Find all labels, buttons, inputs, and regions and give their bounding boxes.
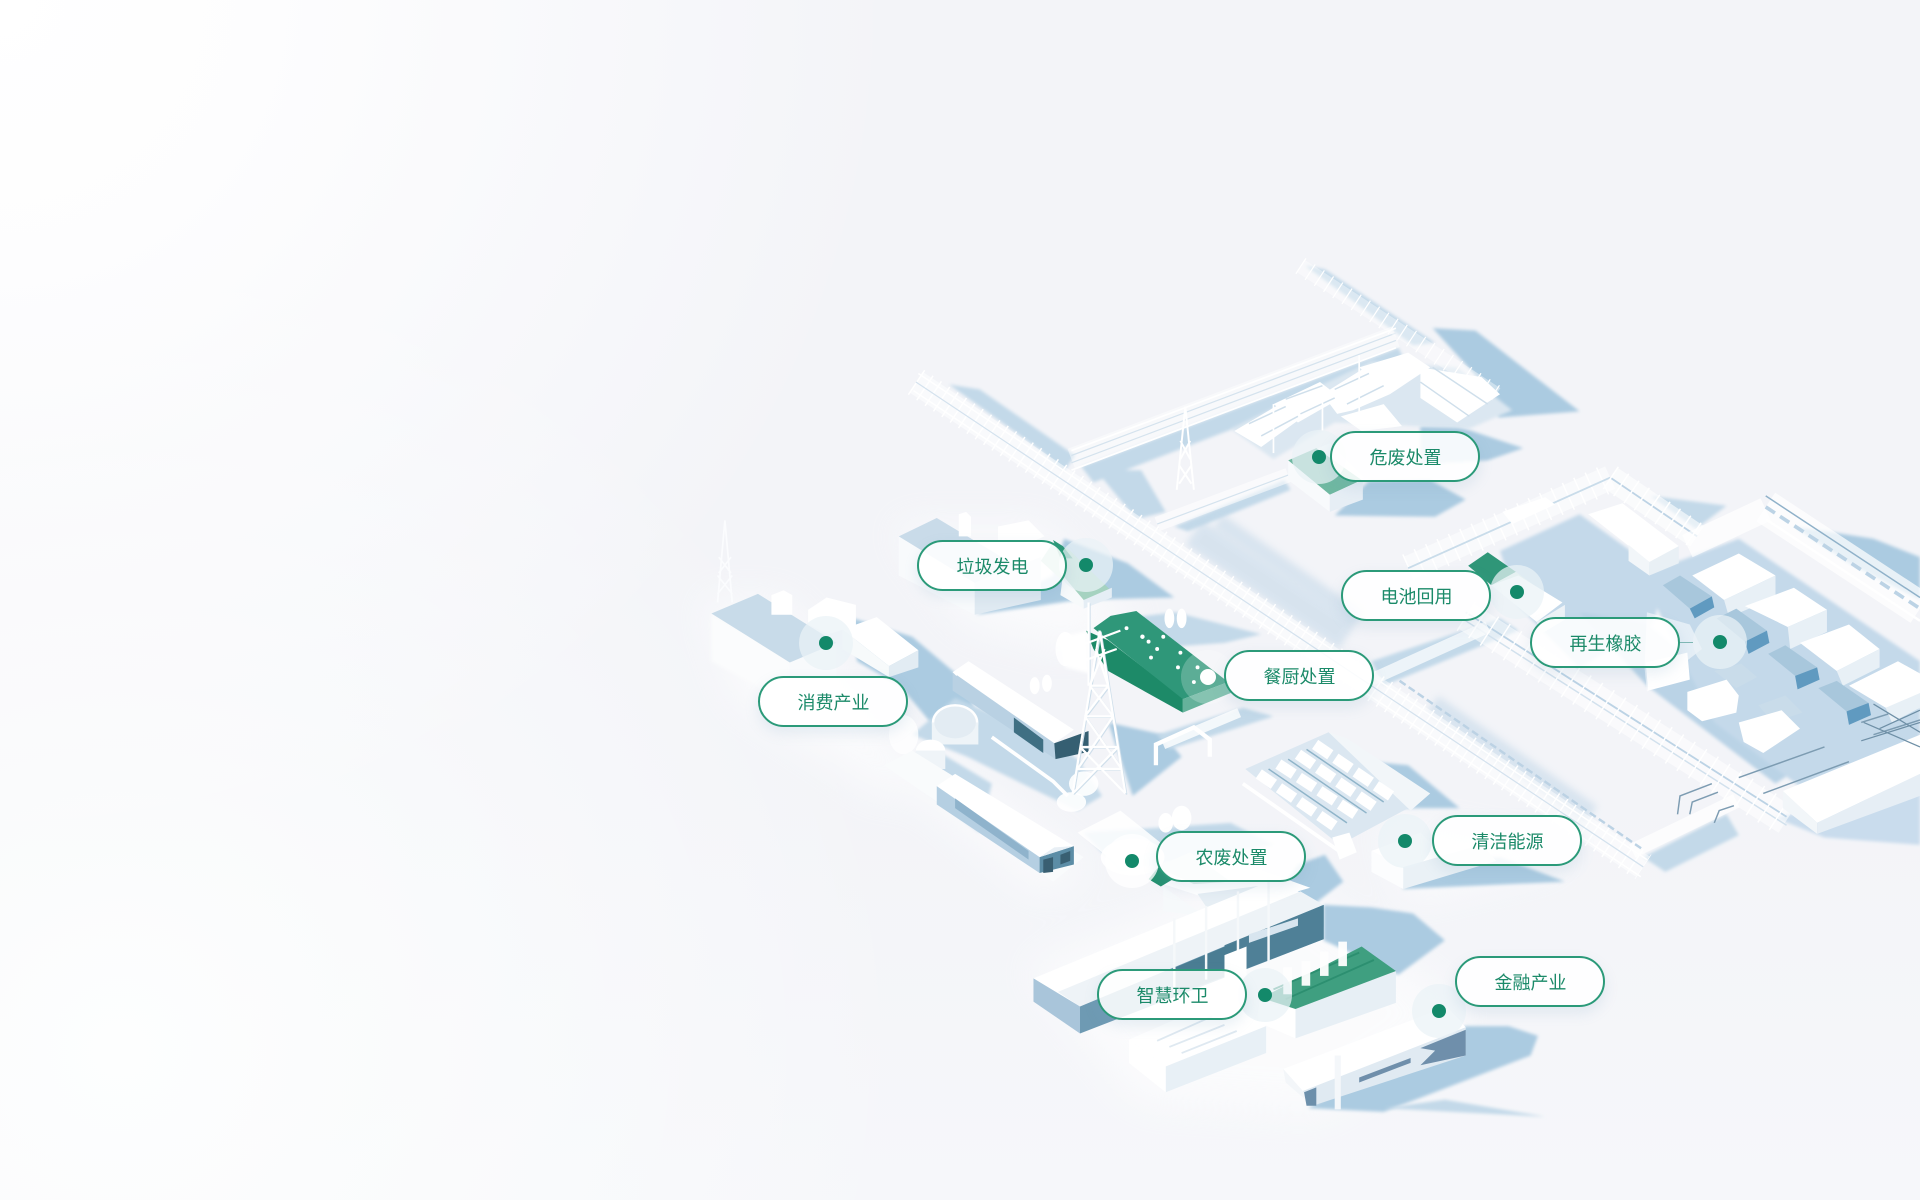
marker: 清洁能源: [1378, 814, 1432, 868]
factory: 智慧环卫 green block: [1259, 942, 1396, 1038]
label: 智慧环卫: [1097, 969, 1247, 1020]
label: 农废处置: [1156, 831, 1306, 882]
label: 智慧环卫: 智慧环卫: [1136, 986, 1208, 1006]
lower workshop: [884, 751, 1084, 882]
label: 再生橡胶: 再生橡胶: [1570, 634, 1642, 654]
ground shadows: [853, 266, 1920, 1117]
hatched shadows of rack: [1194, 520, 1592, 814]
marker: 餐厨处置: [1181, 650, 1235, 704]
tank cluster and pipes: [992, 727, 1210, 876]
marker: 消费产业: [799, 616, 853, 670]
marker: 农废处置: [1105, 834, 1159, 888]
dark pipes at lower right: [1678, 704, 1920, 823]
label: 电池回用: 电池回用: [1380, 587, 1452, 607]
marker: 垃圾发电: [1059, 538, 1113, 592]
label: 餐厨处置: 餐厨处置: [1264, 667, 1336, 687]
label: 农废处置: 农废处置: [1196, 848, 1268, 868]
long bottom block: [1783, 735, 1920, 834]
marker: 再生橡胶: [1693, 615, 1747, 669]
left top block: [1588, 503, 1679, 576]
factory: 危废处置: [1288, 443, 1364, 512]
factory: 金融产业: [1283, 1007, 1466, 1109]
factory: 农废处置: [1149, 852, 1310, 916]
blue gabled roofs: [1663, 576, 1871, 725]
label: 餐厨处置: [1224, 650, 1374, 701]
small gabled sheds: [1644, 612, 1802, 753]
label: 金融产业: [1455, 956, 1605, 1007]
marker: 智慧环卫: [1238, 968, 1292, 1022]
label: 电池回用: [1341, 570, 1491, 621]
label: 危废处置: 危废处置: [1370, 448, 1442, 468]
factory: 餐厨处置 green roof: [1063, 609, 1231, 713]
label: 金融产业: 金融产业: [1494, 973, 1566, 993]
label: 消费产业: [758, 676, 908, 727]
long workshop and tanks: [889, 632, 1089, 769]
marker: 电池回用: [1490, 565, 1544, 619]
connector line: [1679, 642, 1693, 643]
label: 危废处置: [1330, 431, 1480, 482]
factory: lower white block: [1129, 998, 1266, 1092]
right complex shadows: [1500, 496, 1920, 845]
factory: 消费产业: [711, 520, 918, 704]
factory: 清洁能源: [1371, 833, 1496, 889]
factory: 智慧环卫 long hall: [1033, 877, 1324, 1033]
marker: 金融产业: [1412, 984, 1466, 1038]
small platform: [1502, 497, 1555, 524]
label: 消费产业: 消费产业: [798, 693, 870, 713]
power transmission tower: [1073, 407, 1194, 794]
factory: 垃圾发电: [899, 512, 1112, 615]
pipes: [1861, 704, 1920, 747]
label: 清洁能源: 清洁能源: [1472, 832, 1544, 852]
cooling unit array: [1243, 732, 1430, 860]
label: 垃圾发电: [917, 540, 1067, 591]
label: 再生橡胶: [1530, 617, 1680, 668]
label: 清洁能源: [1432, 815, 1582, 866]
white ground glow: [704, 527, 1580, 1114]
tank group below pipe rack: [1234, 353, 1500, 453]
pipe racks: [913, 266, 1920, 877]
marker: 危废处置: [1292, 430, 1346, 484]
recycling plant buildings: [1502, 497, 1920, 834]
white cooling blocks: [1692, 553, 1920, 722]
factory: 电池回用: [1468, 552, 1565, 634]
label: 垃圾发电: 垃圾发电: [956, 557, 1028, 577]
